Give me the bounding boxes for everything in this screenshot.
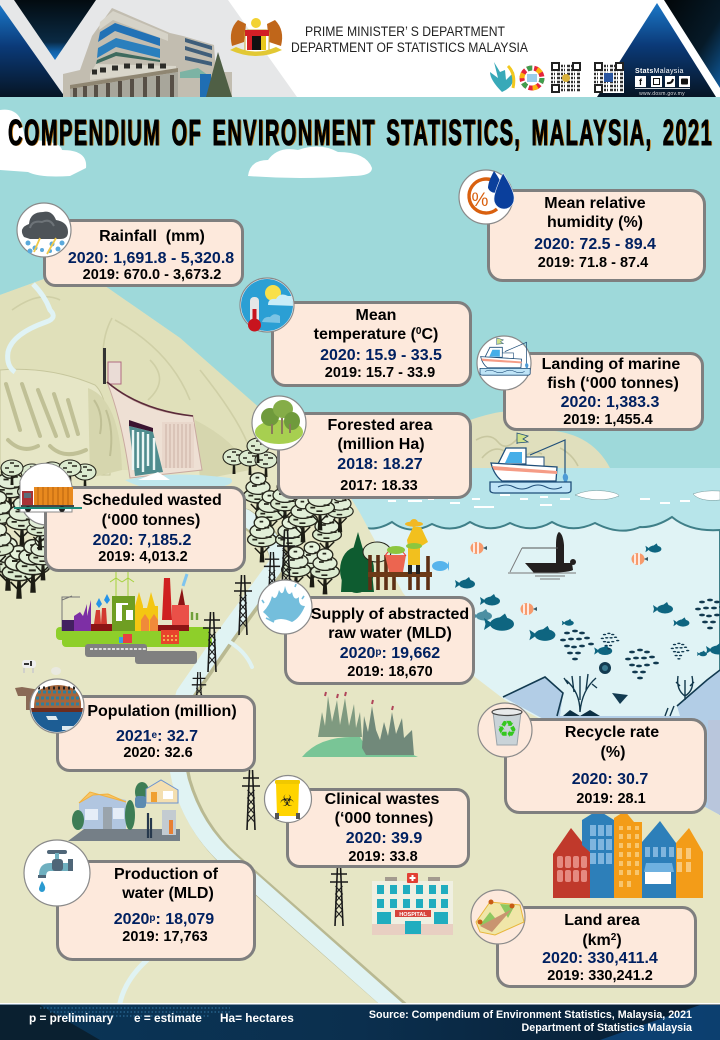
panel: recycle rate: 2019: 28.1 [576,791,646,807]
source note [369,1009,693,1034]
power pylons [192,530,348,926]
panel: water production: water (MLD) [121,885,214,902]
panel: raw water supply: p [375,647,381,658]
panel: land area: 2 [611,932,617,943]
panel: rainfall [17,203,242,286]
hospital [372,873,453,935]
panel: population: : 32.7 [157,728,198,745]
panel: raw water supply: : 19,662 [381,645,440,662]
legend: Ha= hectares [220,1011,294,1025]
panel: landing of marine fish: fish (‘000 tonnes) [547,375,679,392]
coral reef [503,670,720,815]
stats malaysia social: StatsMalaysia [635,68,684,75]
panel: land area: 2020: 330,411.4 [542,950,658,967]
panel: population: 2021 [116,728,152,745]
marsh grass [302,692,418,757]
legend [29,1011,294,1025]
panel: rainfall: 2019: 670.0 - 3,673.2 [83,267,221,283]
mountain stream [8,284,53,372]
panel: temperature [240,278,470,386]
panel: rainfall: 2020: 1,691.8 - 5,320.8 [68,250,234,267]
jetty with farmer [340,519,449,593]
panel: humidity: humidity (%) [547,214,643,231]
ministry building [63,8,232,97]
icon: recycle bin: ♻ [497,716,517,742]
land area text: Land area [564,912,640,929]
panel: scheduled waste: (‘000 tonnes) [102,512,200,529]
stats malaysia social: www.dosm.gov.my [639,91,685,97]
panel: scheduled waste: 2019: 4,013.2 [98,549,188,565]
panel: humidity: 2019: 71.8 - 87.4 [538,255,648,271]
clouds [0,110,372,178]
panel: landing of marine fish: 2020: 1,383.3 [561,394,659,411]
factory cluster [56,572,212,664]
qr codes [551,62,624,93]
production text: Production of [114,866,219,883]
panel: land area: (km [582,932,611,949]
ministry names: DEPARTMENT OF STATISTICS MALAYSIA [291,40,528,55]
panel: recycle rate: (%) [601,744,625,761]
farm animals [15,660,61,710]
logo: sdg wheel [522,68,542,88]
icon: map [471,890,525,944]
panel: water production: p [149,913,155,924]
stats malaysia social: f [639,77,643,87]
panel: water production: 2019: 17,763 [122,929,208,945]
panel: forested area: 2018: 18.27 [337,456,423,473]
panel: population [30,679,254,770]
panel: forested area: 2017: 18.33 [340,478,418,494]
landing text: Landing of marine [542,356,680,373]
panel: clinical wastes: 2020: 39.9 [346,830,422,847]
stats malaysia social [635,68,690,97]
panel: clinical wastes [264,776,468,866]
river [120,517,400,1010]
icon: recycle bin [478,703,532,757]
icon: humidity drops: % [472,190,489,211]
panel: recycle rate: 2020: 30.7 [572,771,648,788]
right triangle [597,3,716,97]
fish shoal [455,542,720,704]
underwater area [355,517,720,830]
ministry names: PRIME MINISTER’ S DEPARTMENT [305,24,505,39]
panel: water production: 2020 [114,911,149,928]
panel: humidity [459,170,704,280]
supply text: Supply of abstracted [311,606,469,623]
left grey band [0,0,297,97]
dam [103,348,232,491]
rainfall text: Rainfall (mm) [99,228,205,245]
panel: humidity: 2020: 72.5 - 89.4 [534,236,656,253]
sea surface band [320,468,720,538]
icon: forest island [252,396,306,450]
temperature text: Mean [356,307,396,324]
fishing boat [490,433,571,493]
icon: thermometer [240,278,296,332]
panel: land area [471,890,696,986]
recycle text: Recycle rate [565,724,659,741]
panel: water production [24,840,254,960]
panel: landing of marine fish: 2019: 1,455.4 [563,412,653,428]
panel: temperature: 0 [416,326,422,337]
icon: water tap [24,840,90,906]
clinical text: Clinical wastes [325,791,439,808]
icon: humidity drops [459,170,514,224]
scheduled waste text: Scheduled wasted [82,492,222,509]
legend: e = estimate [134,1011,202,1025]
panel: clinical wastes: 2019: 33.8 [348,849,418,865]
coat of arms [230,18,282,56]
panel: population: 2020: 32.6 [123,745,193,761]
panel: recycle rate [478,703,706,812]
panel: land area: 2019: 330,241.2 [547,968,653,984]
legend: p = preliminary [29,1011,114,1025]
background: sky [0,97,720,517]
distant island [470,412,610,468]
panel: clinical wastes: (‘000 tonnes) [335,810,433,827]
icon: crowd on globe [30,679,84,734]
panel: population: e [152,730,158,741]
panel: water production: : 18,079 [155,911,214,928]
source note: Department of Statistics Malaysia [522,1022,693,1034]
ministry names [291,24,528,55]
panel: temperature: temperature ( [314,326,416,343]
icon: rain cloud [17,203,71,257]
panel: land area: ) [616,932,622,949]
city buildings [553,810,703,898]
panel: scheduled waste: 2020: 7,185.2 [93,532,191,549]
logo: hand [490,62,514,92]
corals [564,674,694,716]
foam on sea [388,490,720,508]
icon: biohazard bin: ☣ [280,793,294,810]
population text: Population (million) [87,703,237,720]
panel: forested area [252,396,470,498]
panel: raw water supply: 2020 [340,645,375,662]
icon: waste truck [14,463,82,512]
panel: raw water supply [258,580,474,684]
humidity text: Mean relative [544,195,646,212]
icon: fishing boat [477,336,531,390]
panel: raw water supply: 2019: 18,670 [347,664,433,680]
hills and land [0,279,720,1005]
panel: temperature: C) [421,326,438,343]
trees [0,438,353,599]
footer bar [0,1003,720,1040]
panel: temperature: 2019: 15.7 - 33.9 [325,365,435,381]
panel: temperature: 2020: 15.9 - 33.5 [320,347,442,364]
forested text: Forested area [328,417,433,434]
houses and street [68,780,180,841]
icon: biohazard bin [264,776,312,822]
source note: Source: Compendium of Environment Statistics, Malaysia, 2021 [369,1009,692,1021]
hospital: HOSPITAL [399,912,427,918]
panel: raw water supply: raw water (MLD) [328,625,452,642]
silhouette fisherman [508,532,576,579]
icon: water splash [258,580,312,634]
panel: forested area: (million Ha) [337,436,425,453]
panel: landing of marine fish [477,336,702,430]
header bar [0,0,720,97]
panel: scheduled waste [14,463,244,570]
